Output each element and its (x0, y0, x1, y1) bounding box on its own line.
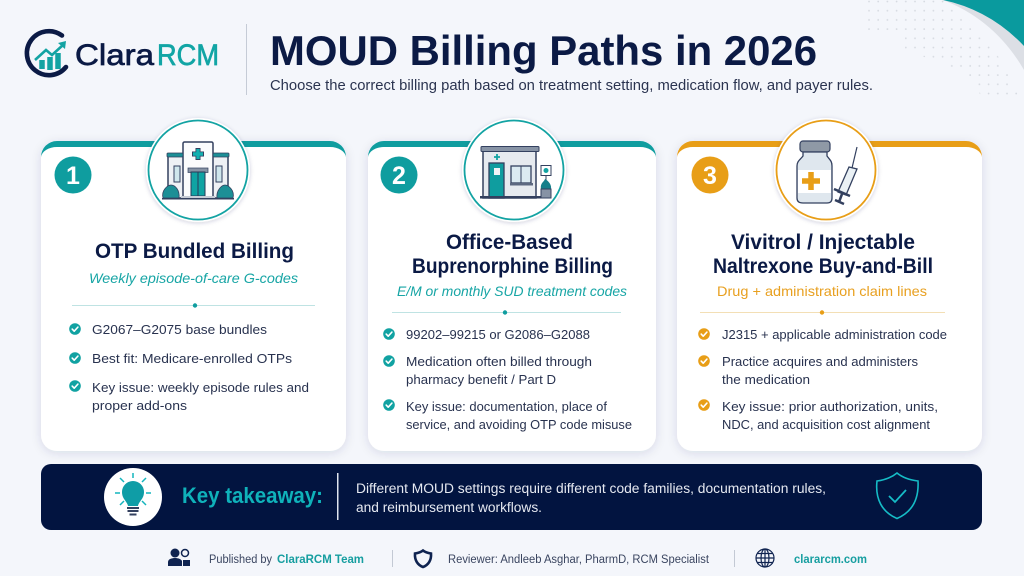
heading: Buprenorphine Billing (412, 255, 613, 278)
logo (27, 31, 219, 75)
bullet list: Key issue: prior authorization, units, (722, 399, 938, 414)
subheading: Drug + administration claim lines (717, 283, 927, 299)
heading: OTP Bundled Billing (95, 240, 294, 263)
bullet list: Key issue: weekly episode rules and (92, 380, 309, 395)
footer: publisher: ClaraRCM Team (277, 554, 364, 566)
logo: RCM (157, 39, 219, 72)
badge 3 (692, 156, 728, 194)
bullet list: NDC, and acquisition cost alignment (722, 417, 930, 432)
bullet list (69, 322, 309, 413)
logo: Clara (75, 39, 154, 72)
bullet list: Practice acquires and administers (722, 354, 918, 369)
icon: shield (415, 550, 431, 567)
badge 3: 3 (703, 162, 717, 190)
heading: Vivitrol / Injectable (731, 231, 915, 254)
key takeaway banner (41, 464, 982, 530)
takeaway text: and reimbursement workflows. (356, 500, 542, 515)
takeaway text (356, 481, 826, 515)
subheading: E/M or monthly SUD treatment codes (397, 283, 627, 299)
heading (412, 231, 613, 278)
bullet list (698, 327, 947, 432)
footer: website: clararcm.com (794, 554, 867, 566)
icon: clinic office (462, 118, 566, 222)
bullet list: 99202–99215 or G2086–G2088 (406, 327, 590, 342)
icon: vial and syringe (774, 118, 878, 222)
takeaway text: Different MOUD settings require different code families, documentation rules, (356, 481, 826, 496)
panel: office-based buprenorphine billing (368, 118, 656, 451)
bullet list: service, and avoiding OTP code misuse (406, 417, 632, 432)
bullet list: Key issue: documentation, place of (406, 399, 607, 414)
bullet list (383, 327, 632, 432)
badge 1 (54, 156, 92, 194)
bullet list: pharmacy benefit / Part D (406, 372, 556, 387)
icon: light bulb (104, 468, 162, 526)
footer: reviewer: Reviewer: Andleeb Asghar, PharmD, RCM Specialist (448, 554, 710, 566)
footer: publisher (168, 548, 364, 566)
icon: shield check (877, 473, 918, 518)
bullet list: proper add-ons (92, 398, 188, 413)
bullet list: Best fit: Medicare-enrolled OTPs (92, 351, 293, 366)
icon: hospital (146, 118, 250, 222)
footer: publisher: Published by (209, 554, 272, 566)
heading (713, 231, 933, 278)
footer: website (756, 549, 867, 567)
panel: OTP bundled billing (41, 118, 346, 451)
title: MOUD Billing Paths in 2026 (270, 27, 817, 74)
footer: reviewer (415, 550, 710, 567)
badge 2: 2 (392, 162, 406, 190)
subheading: Weekly episode-of-care G-codes (89, 270, 298, 286)
corner swoosh (943, 0, 1024, 70)
icon: globe (756, 549, 774, 567)
bullet list: the medication (722, 372, 810, 387)
bullet list: Medication often billed through (406, 354, 592, 369)
label: Key takeaway: (182, 483, 323, 508)
background dot pattern (868, 0, 1024, 104)
icon: people (168, 548, 190, 566)
subtitle: Choose the correct billing path based on treatment setting, medication flow, and payer rules. (270, 78, 873, 94)
bullet list: J2315 + applicable administration code (722, 327, 947, 342)
badge 1: 1 (66, 162, 80, 190)
heading: Office-Based (446, 231, 573, 254)
panel: Vivitrol buy-and-bill (677, 118, 982, 451)
heading: Naltrexone Buy-and-Bill (713, 255, 933, 278)
badge 2 (380, 156, 418, 194)
bullet list: G2067–G2075 base bundles (92, 322, 268, 337)
